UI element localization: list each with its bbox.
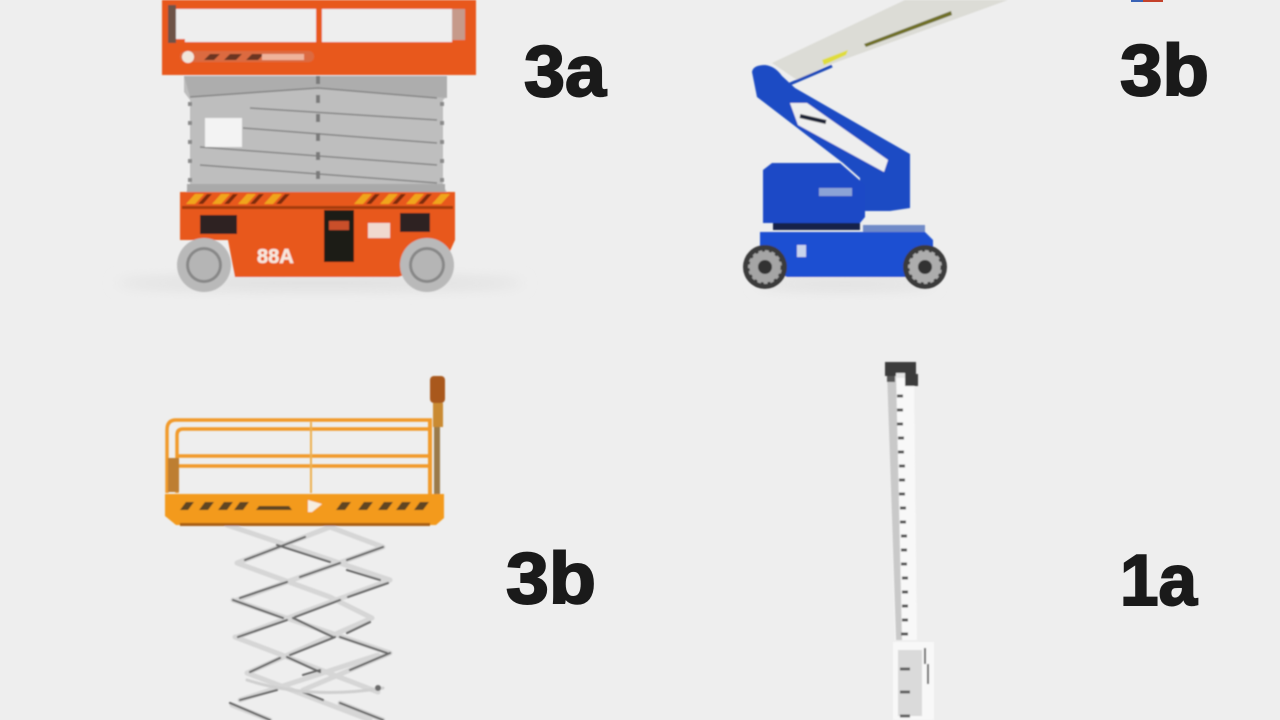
orange scissor lift 3a [115, 0, 525, 292]
blue lift wheels [743, 245, 947, 289]
mast column [887, 372, 917, 640]
blue boom lift 3b [743, 0, 1008, 289]
mast head [885, 362, 918, 386]
vertical mast lift [885, 362, 934, 720]
label 3b top: 3b [1120, 31, 1209, 111]
wheels [177, 238, 454, 292]
label 3a: 3a [524, 32, 607, 112]
scissor arms [227, 525, 390, 720]
blue arm [752, 65, 910, 211]
orange scissor lift 3b [165, 376, 445, 720]
orange chassis [180, 192, 455, 277]
orange chassis: 88A [257, 246, 294, 268]
orange platform with railing [165, 376, 445, 526]
scissor stack [184, 76, 447, 192]
boom arm [772, 0, 1008, 84]
label 1a: 1a [1120, 541, 1198, 621]
mast base [893, 642, 934, 720]
top edge fragment of equipment [1131, 0, 1163, 2]
blue turret [763, 163, 925, 233]
blue chassis [760, 232, 933, 277]
label 3b bottom: 3b [506, 539, 596, 619]
orange platform with railing [162, 0, 476, 75]
